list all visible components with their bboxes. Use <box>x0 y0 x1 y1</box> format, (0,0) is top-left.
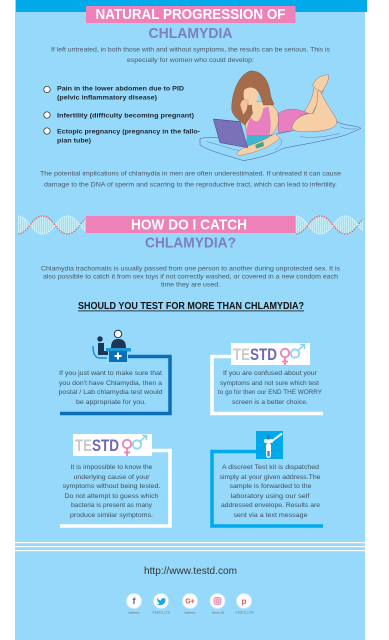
card text: A discreet Test kit is dispatched <box>222 465 319 471</box>
symptom list: Ectopic pregnancy (pregnancy in the fallo- <box>57 128 200 136</box>
card text: postal / Lab chlamydia test would <box>58 390 162 396</box>
paragraph: transmission: also possible to catch it from sex toys if not correctly washed, or covered in a new condom each <box>43 274 338 280</box>
card text: you don't have Chlamydia, then a <box>59 381 163 387</box>
icon: facebook: f <box>132 596 136 606</box>
paragraph: implications in men: damage to the DNA of sperm and scarring to the reproductive tract, which can lead to infertility. <box>44 182 337 188</box>
heading: natural progression <box>86 6 296 42</box>
logo: TESTD <box>73 434 152 456</box>
card text: underlying cause of your <box>74 475 150 481</box>
intro paragraph: If left untreated, in both those with and without symptoms, the results can be serious. This is <box>51 48 330 54</box>
card text: bacteria is present as many <box>71 503 152 509</box>
symptom list: (pelvic inflammatory disease) <box>57 94 157 102</box>
card text: Do not attempt to guess which <box>64 494 158 500</box>
card text <box>62 465 161 519</box>
card text: If you just want to make sure that <box>59 371 162 377</box>
card text: symptoms without being tested. <box>62 484 161 490</box>
card text: laboratory using our self <box>230 494 310 500</box>
card: impossible to know <box>60 434 170 526</box>
icon: facebook <box>126 594 142 614</box>
card frame <box>212 452 323 526</box>
symptom list: Infertility (difficulty becoming pregnant) <box>57 112 194 120</box>
card: postal or lab test <box>58 330 170 414</box>
icon: instagram: /testd_ltd <box>212 610 224 614</box>
illustration: woman lying with laptop <box>200 71 361 161</box>
paragraph: transmission: time they are used. <box>161 282 220 288</box>
card text: sent via a text message <box>234 513 308 519</box>
icon: pinterest <box>235 594 254 614</box>
card frame <box>212 356 323 414</box>
symptom list: pian tube) <box>57 138 91 144</box>
card text <box>218 371 322 406</box>
website url: http://www.testd.com <box>144 565 237 577</box>
card text <box>220 465 321 519</box>
card text: be appropriate for you. <box>76 400 146 406</box>
card text: addressed envelope. Results are <box>221 503 321 509</box>
card: end the worry screen <box>212 343 323 414</box>
icon: facebook: /getlestd <box>128 610 140 614</box>
paragraph: transmission <box>41 266 340 288</box>
card text: If you are confused about your <box>223 371 317 377</box>
card text: produce similar symptoms. <box>70 513 153 519</box>
icon: google plus <box>182 594 198 614</box>
card text: to go for then our END THE WORRY <box>218 390 322 396</box>
symptom list: Pain in the lower abdomen due to PID <box>57 86 184 92</box>
icon: google plus: /getlestd <box>184 610 196 614</box>
intro paragraph <box>51 48 330 64</box>
icon: pinterest: p <box>241 596 247 606</box>
icon: pinterest: /TESTD_LTD/ <box>235 610 254 614</box>
icon: doctor desk <box>93 330 131 362</box>
card text: symptoms and not sure which test <box>220 381 319 387</box>
card: discreet test kit <box>212 431 323 526</box>
heading: how do I catch: HOW DO I CATCH <box>131 216 247 234</box>
top header bar <box>16 0 367 12</box>
paragraph: implications in men: The potential implications of chlamydia in men are often underestimated. If untreated it can cause <box>40 172 342 178</box>
card text: sample is forwarded to the <box>230 484 312 490</box>
icon: test kit <box>256 431 283 459</box>
DNA strand left <box>5 216 105 234</box>
icon: google plus: G+ <box>185 598 195 606</box>
DNA strand right <box>283 216 383 234</box>
intro paragraph: especially for women who could develop: <box>127 58 254 64</box>
card frame <box>60 450 170 526</box>
card text: simply at your given address.The <box>220 475 321 481</box>
logo: TESTD <box>231 343 310 365</box>
paragraph: transmission: Chlamydia trachomatis is usually passed from one person to another during unprotected sex. It is <box>41 266 340 272</box>
icon: twitter: /TESTD_LTD <box>152 610 171 614</box>
social icons <box>126 594 254 614</box>
heading: natural progression: NATURAL PROGRESSION OF <box>96 6 286 23</box>
subheading: should you test: SHOULD YOU TEST FOR MORE THAN CHLAMYDIA? <box>78 301 304 312</box>
card text <box>58 371 163 406</box>
paragraph: implications in men <box>40 172 342 188</box>
heading: how do I catch: CHLAMYDIA? <box>145 234 236 252</box>
card text: screen is a better choice. <box>232 400 308 406</box>
heading: natural progression: CHLAMYDIA <box>148 25 233 42</box>
symptom list <box>44 86 200 144</box>
card frame <box>60 356 170 414</box>
card text: It is impossible to know the <box>70 465 153 471</box>
heading: how do I catch <box>86 216 296 252</box>
